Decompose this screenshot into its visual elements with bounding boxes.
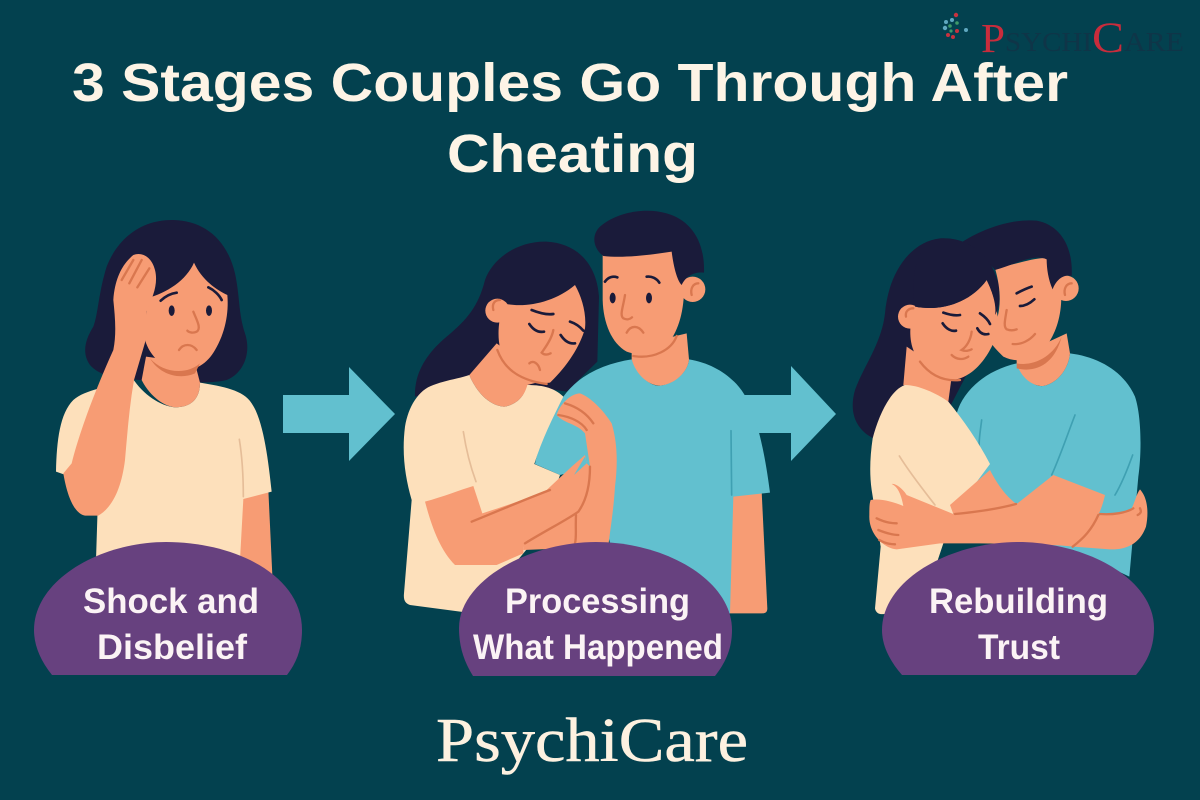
man arm [723, 492, 767, 613]
arrow: stage 1 to stage 2 [283, 367, 395, 461]
arm creases [877, 504, 1141, 547]
raised arm and hand [63, 254, 156, 516]
woman neck [469, 343, 547, 407]
label text: Processing [505, 582, 690, 621]
man face details [1005, 283, 1072, 344]
neck [142, 357, 200, 407]
footer brand: PsychiCare [436, 707, 748, 775]
figure: stage 2 couple [404, 211, 770, 613]
woman face details [493, 300, 583, 370]
hair [85, 220, 247, 382]
arrow: stage 2 to stage 3 [740, 366, 836, 461]
hugging arms [869, 470, 1105, 549]
woman ear [485, 299, 509, 323]
man face [989, 258, 1061, 360]
title: 3 Stages Couples Go Through After [72, 53, 1068, 113]
eyebrows, eyes, nose, mouth [161, 287, 222, 350]
arm creases [472, 403, 593, 543]
man neck [1017, 333, 1070, 386]
title: Cheating [447, 124, 698, 184]
shirt crease [728, 431, 734, 495]
label text: Rebuilding [929, 582, 1108, 621]
man ear [680, 277, 705, 302]
woman hair front [913, 239, 999, 315]
panel: stage 3 label: Trust [978, 628, 1060, 667]
shirt [56, 379, 272, 560]
logo: PsychiCare top right: C [1092, 15, 1124, 62]
panel: stage 2 label [459, 542, 732, 676]
man hair [594, 211, 704, 285]
figure: stage 3 couple hugging [853, 220, 1147, 614]
man face [603, 247, 684, 354]
woman crossing arm [425, 455, 590, 565]
arm highlight [574, 457, 587, 475]
man shirt [947, 353, 1141, 577]
chin shadow [150, 358, 200, 376]
title [72, 53, 1068, 184]
panel: stage 3 label [882, 542, 1154, 675]
man ear [1053, 276, 1079, 301]
panel: stage 2 label: What Happened [473, 628, 723, 667]
man shirt creases [979, 415, 1133, 495]
logo wordmark: P [981, 15, 1005, 61]
man's hand behind [1073, 489, 1147, 549]
logo: PsychiCare top right: SYCHI [1005, 27, 1092, 57]
woman raised forearm and hand on shoulder [523, 393, 617, 550]
man neck [632, 333, 689, 386]
woman jaw shadow [920, 362, 960, 380]
pill shape [882, 542, 1154, 675]
finger lines [122, 260, 149, 287]
woman jaw shadow [497, 350, 547, 384]
panel: stage 1 label: Disbelief [97, 628, 247, 667]
man jaw shadow [1017, 337, 1062, 370]
woman back hair [853, 238, 999, 438]
woman face [910, 280, 998, 380]
figure: stage 1 woman, hand on forehead [56, 220, 272, 575]
shirt crease [899, 456, 935, 505]
panel: stage 1 label [34, 542, 302, 675]
pill shape [34, 542, 302, 675]
right arm [237, 490, 272, 575]
man face details [605, 277, 698, 333]
pill shape [459, 542, 732, 676]
logo: PsychiCare top right [943, 13, 1184, 62]
face [145, 263, 228, 371]
woman shirt crease [463, 432, 476, 482]
man jaw shadow [633, 336, 677, 357]
woman shirt [404, 375, 563, 613]
shirt crease [239, 439, 243, 497]
man shirt [535, 359, 770, 613]
woman face details [906, 308, 990, 359]
label text: Shock and [83, 582, 259, 621]
icon: logo dots [943, 13, 968, 39]
man hair [963, 220, 1072, 289]
logo: PsychiCare top right: ARE [1124, 27, 1184, 57]
woman face [499, 285, 585, 383]
woman ear [898, 305, 922, 329]
woman hair [415, 242, 599, 397]
woman neck [903, 347, 952, 402]
woman shirt [870, 385, 990, 614]
